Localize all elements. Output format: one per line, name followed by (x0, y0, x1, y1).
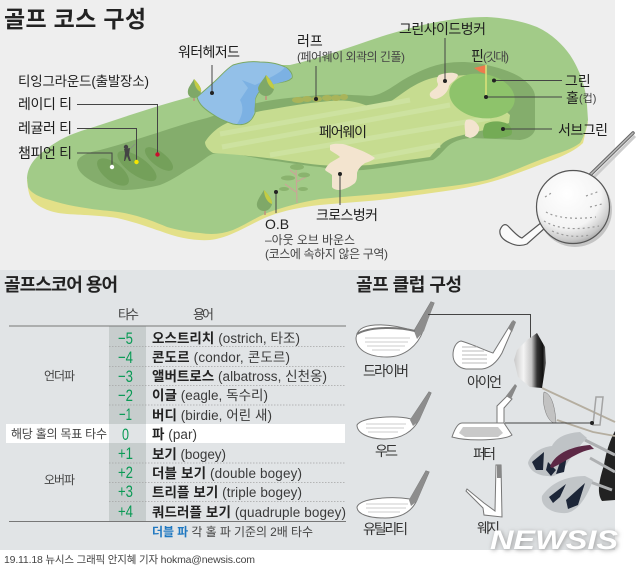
score terms: 더블 보기 (double bogey) (152, 466, 302, 481)
irons lower (542, 476, 593, 513)
wood photo (543, 392, 556, 423)
score terms: 트리플 보기 (triple bogey) (152, 485, 302, 500)
label: out of bounds: (코스에 속하지 않은 구역) (265, 247, 388, 261)
score terms: 버디 (birdie, 어린 새) (152, 408, 272, 423)
score terms: 오스트리치 (ostrich, 타조) (152, 331, 300, 346)
under par label: 언더파 (44, 369, 75, 383)
shafts (542, 388, 615, 436)
tee pad: champion (92, 153, 134, 191)
ball dimples (544, 191, 602, 236)
label: out of bounds: –아웃 오브 바운스 (265, 233, 355, 247)
greenside bunker (430, 73, 458, 99)
club: utility: 유틸리티 (363, 521, 408, 537)
maroon iron (550, 445, 594, 468)
bunker near sub green (465, 119, 479, 138)
putter photo (593, 397, 603, 425)
label: pin: 핀 (471, 48, 484, 64)
club shadow (592, 136, 635, 179)
club: wood (357, 392, 431, 459)
connector driver to photo (428, 314, 532, 353)
score numbers: 0 (122, 425, 129, 444)
label: rough (297, 33, 405, 101)
bare tree (279, 164, 310, 203)
label: ladies tee (18, 96, 160, 157)
club: utility (357, 471, 429, 537)
club: driver: 드라이버 (363, 363, 409, 379)
score terms: 파 (par) (152, 427, 197, 442)
label: champion tee: 챔피언 티 (18, 145, 72, 161)
label: pin: (깃대) (483, 50, 509, 64)
driver head (514, 333, 546, 388)
club: wedge: 웨지 (477, 520, 500, 536)
label: cross bunker: 크로스벙커 (316, 207, 378, 223)
label: greenside bunker: 그린사이드벙커 (399, 21, 486, 37)
logo: newsis watermark (490, 525, 619, 556)
iron shafts (585, 440, 615, 490)
label: sub green: 서브그린 (558, 122, 608, 138)
tree at out of bounds (257, 190, 272, 215)
panel: golf course map (27, 17, 588, 240)
irons upper (528, 432, 587, 476)
tree right of water (258, 75, 274, 100)
ball shadow (538, 173, 612, 247)
par highlight band (6, 424, 345, 443)
target label: 해당 홀의 목표 타수 (11, 427, 107, 441)
label: regular tee: 레귤러 티 (18, 120, 72, 136)
club shaft (590, 133, 633, 175)
score numbers: −5 (118, 329, 133, 348)
fairway (205, 75, 510, 166)
score numbers: +1 (118, 444, 133, 463)
label: pin (471, 48, 509, 64)
label: rough: 러프 (297, 33, 323, 49)
top section background (0, 0, 615, 270)
label: hole (484, 90, 596, 106)
water shade (237, 67, 291, 124)
club shaft highlight (590, 133, 633, 175)
bag (599, 431, 615, 501)
icon: golfer (124, 144, 135, 161)
fairway stripes (220, 100, 490, 162)
teeing ground (92, 143, 177, 191)
row dividers (109, 346, 346, 502)
label: ladies tee: 레이디 티 (18, 96, 72, 112)
footer credit: 19.11.18 뉴시스 그래픽 안지혜 기자 hokma@newsis.com (4, 554, 255, 566)
pin and flag (474, 65, 486, 97)
tee pad: regular (113, 145, 161, 187)
score terms: 앨버트로스 (albatross, 신천옹) (152, 369, 327, 384)
score table (6, 307, 346, 539)
ball (536, 170, 610, 244)
score numbers: +3 (118, 482, 133, 501)
score numbers: +2 (118, 463, 133, 482)
sub green (483, 121, 512, 138)
label: out of bounds: O.B (265, 216, 289, 232)
score terms: 쿼드러플 보기 (quadruple bogey) (152, 505, 346, 520)
score numbers: +4 (118, 502, 133, 521)
over par label: 오버파 (44, 473, 75, 487)
iron back details (532, 452, 567, 476)
club head (500, 222, 545, 245)
club: iron (453, 320, 516, 390)
label: out of bounds (265, 190, 388, 261)
column header: 타수 (118, 307, 139, 322)
label: water hazard: 워터헤저드 (178, 44, 240, 60)
rough band (77, 62, 535, 190)
photo: club set (514, 333, 615, 513)
score terms: 콘도르 (condor, 콘도르) (152, 350, 290, 365)
connector putter to photo (505, 421, 594, 425)
label: sub green (501, 122, 608, 138)
tree left of water (188, 79, 201, 101)
heading: golf club composition: 골프 클럽 구성 (356, 275, 462, 295)
heading: golf score terms: 골프스코어 용어 (4, 275, 118, 295)
double par note: 더블 파 각 홀 파 기준의 2배 타수 (152, 525, 313, 539)
course yellow rim (27, 122, 588, 240)
club: wedge (466, 465, 502, 536)
score numbers: −2 (118, 386, 133, 405)
bottom section background (0, 270, 615, 550)
score terms (152, 331, 346, 520)
label: green (492, 73, 591, 89)
table rules (9, 325, 346, 327)
score terms: 이글 (eagle, 독수리) (152, 388, 268, 403)
cross bunker (325, 144, 375, 190)
label: fairway: 페어웨이 (319, 124, 367, 140)
water hazard (197, 62, 292, 125)
score numbers: −3 (118, 367, 133, 386)
label: teeing ground: 티잉그라운드(출발장소) (18, 74, 149, 89)
title: golf course: 골프 코스 구성 (4, 6, 146, 32)
lower iron details (549, 483, 585, 509)
label: hole: (컵) (579, 92, 596, 105)
rough grass patch (292, 94, 348, 103)
club: putter: 퍼터 (473, 446, 496, 462)
club: wood: 우드 (375, 443, 398, 459)
icon: golf ball with club (500, 133, 635, 247)
label: rough: (페어웨이 외곽의 긴풀) (297, 50, 405, 64)
tee pad: ladies (141, 143, 177, 175)
label: green: 그린 (565, 73, 591, 89)
club: driver (356, 302, 434, 379)
course green (27, 17, 588, 234)
strokes column (109, 326, 146, 521)
club: putter (452, 384, 517, 462)
putting green (446, 69, 518, 123)
club: iron: 아이언 (467, 374, 502, 390)
panel: golf clubs (356, 302, 615, 537)
watermark text: NEWSIS (490, 525, 618, 555)
score terms: 보기 (bogey) (152, 447, 226, 462)
par cell (109, 424, 146, 443)
label: hole: 홀 (566, 90, 579, 106)
pin (485, 65, 487, 97)
label: champion tee (18, 145, 114, 169)
score numbers: −4 (118, 348, 133, 367)
column header: 용어 (193, 307, 214, 322)
label: greenside bunker (399, 21, 486, 83)
watermark shadow: NEWSIS (491, 526, 619, 556)
flag (474, 65, 486, 74)
label: regular tee (18, 120, 139, 164)
score numbers: −1 (119, 405, 132, 424)
score numbers (118, 329, 133, 521)
label: cross bunker (316, 172, 378, 223)
label: water hazard (178, 44, 240, 95)
